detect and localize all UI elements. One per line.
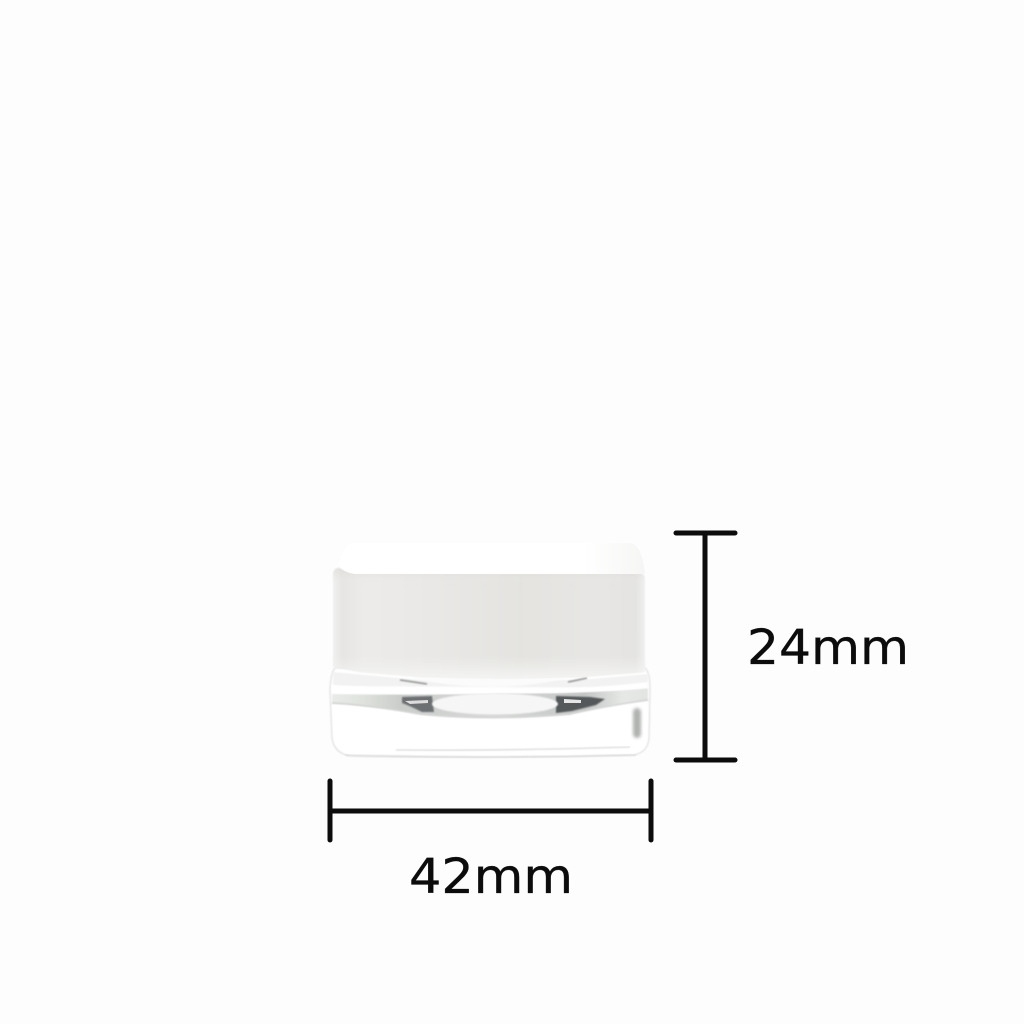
width label: 42mm [409, 849, 573, 905]
height bracket [676, 533, 735, 760]
width bracket [330, 781, 651, 840]
jar glass base [330, 668, 650, 757]
height label: 24mm [747, 620, 909, 676]
icon: glass jar [330, 543, 650, 757]
jar lid top [339, 543, 645, 574]
jar lid side [333, 568, 645, 687]
